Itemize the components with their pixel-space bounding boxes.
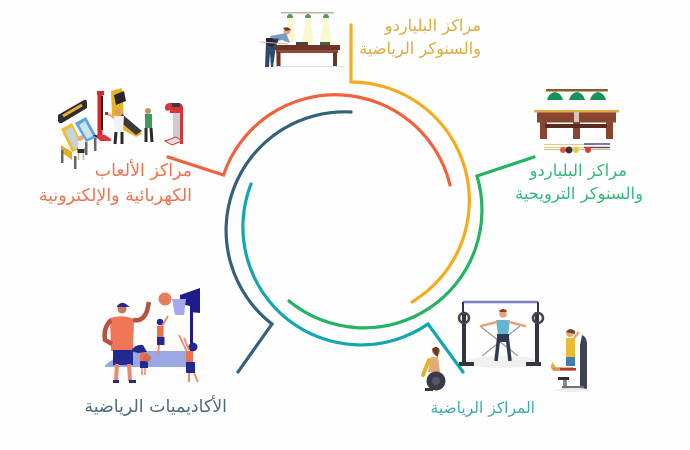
label: billiard and snooker sports centers: [359, 16, 481, 59]
label: sports academies: الأكاديميات الرياضية: [84, 395, 227, 417]
icon: arcade machines: [58, 88, 183, 169]
academy: hoop and backboard: [190, 312, 193, 364]
label: recreational billiard centers: مراكز البلياردو: [529, 161, 627, 181]
ring of coloured arcs: [168, 25, 534, 372]
academy: child with raised arms: [188, 342, 198, 352]
gym: standing man: [499, 310, 507, 318]
label: arcade centers: مراكز الألعاب: [95, 159, 192, 181]
academy: girl with ball: [131, 345, 147, 353]
gym: man doing leg raises: [566, 329, 574, 337]
icon: billiard player: [260, 12, 344, 67]
gym: pull-up machine: [580, 335, 587, 390]
icon: snooker table: [534, 89, 619, 154]
label: recreational billiard centers: والسنوكر الترويحية: [515, 184, 643, 204]
label: arcade centers: [39, 159, 192, 206]
arc: slate: [226, 112, 351, 372]
label: recreational billiard centers: [515, 161, 643, 204]
arc: red: [168, 95, 450, 185]
academy: jumping child: [157, 319, 163, 325]
arcade: left pinball: [58, 100, 87, 123]
arc: teal: [243, 184, 463, 372]
gym: man on tyre: [432, 347, 440, 355]
label: arcade centers: الكهربائية والإلكترونية: [39, 186, 192, 206]
label: sports centers: المراكز الرياضية: [431, 399, 535, 417]
arcade: red punching machine: [165, 103, 183, 124]
arcade: yellow cabinet: [111, 88, 142, 137]
academy: coach: [118, 304, 126, 314]
icon: gym figures: [423, 302, 590, 392]
arc: yellow: [351, 25, 469, 302]
label: billiard and snooker sports centers: والسنوكر الرياضية: [359, 39, 481, 59]
arcade: small child: [78, 136, 84, 140]
academy: ball: [158, 292, 172, 306]
arc: green: [289, 157, 534, 328]
arcade: red high striker: [97, 91, 104, 95]
icon: basketball academy: [105, 288, 200, 383]
arcade: player in green: [145, 108, 151, 114]
label: billiard and snooker sports centers: مراكز البلياردو: [384, 16, 481, 36]
gym: cable machine frame: [463, 301, 538, 303]
arcade: player in white: [115, 109, 121, 115]
